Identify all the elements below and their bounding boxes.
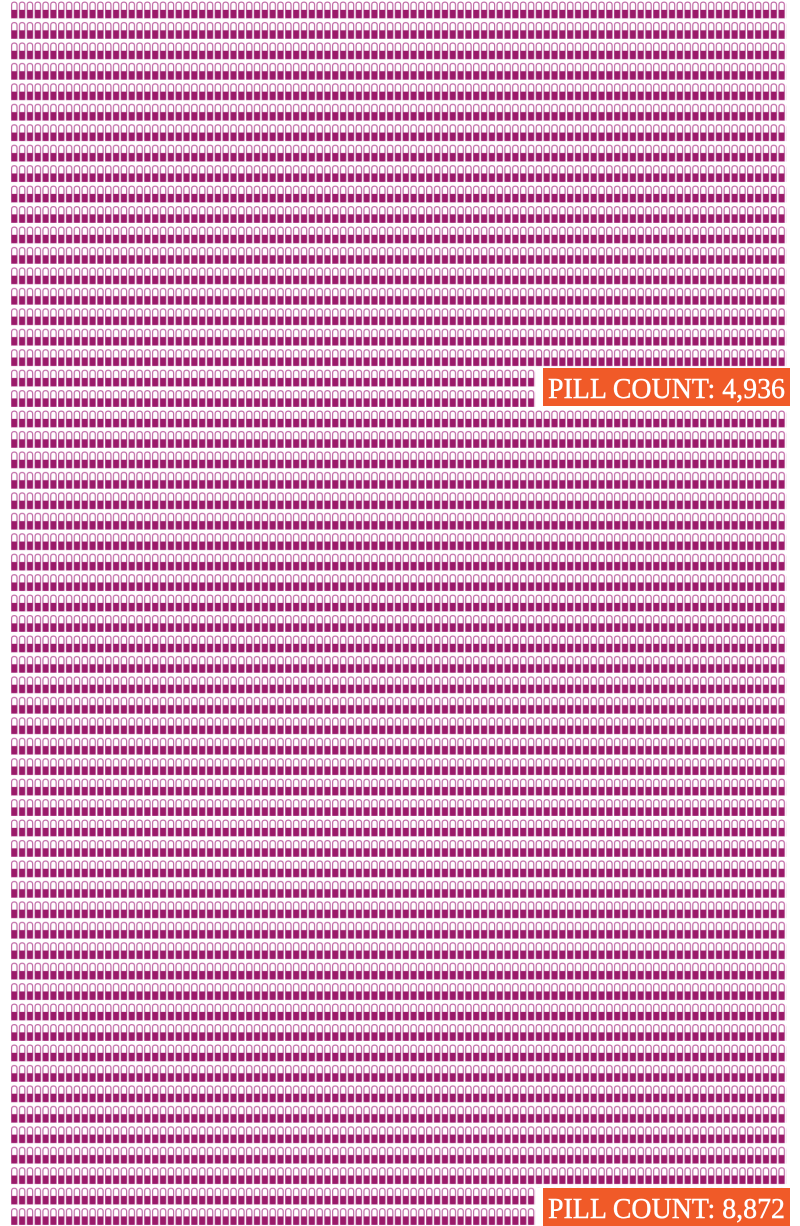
callout: pill count 4,936: PILL COUNT: 4,936 — [548, 374, 785, 405]
callout: pill count 8,872: PILL COUNT: 8,872 — [548, 1194, 785, 1225]
pill grid: first block — [11, 2, 786, 410]
pill grid: second block — [11, 410, 786, 1226]
